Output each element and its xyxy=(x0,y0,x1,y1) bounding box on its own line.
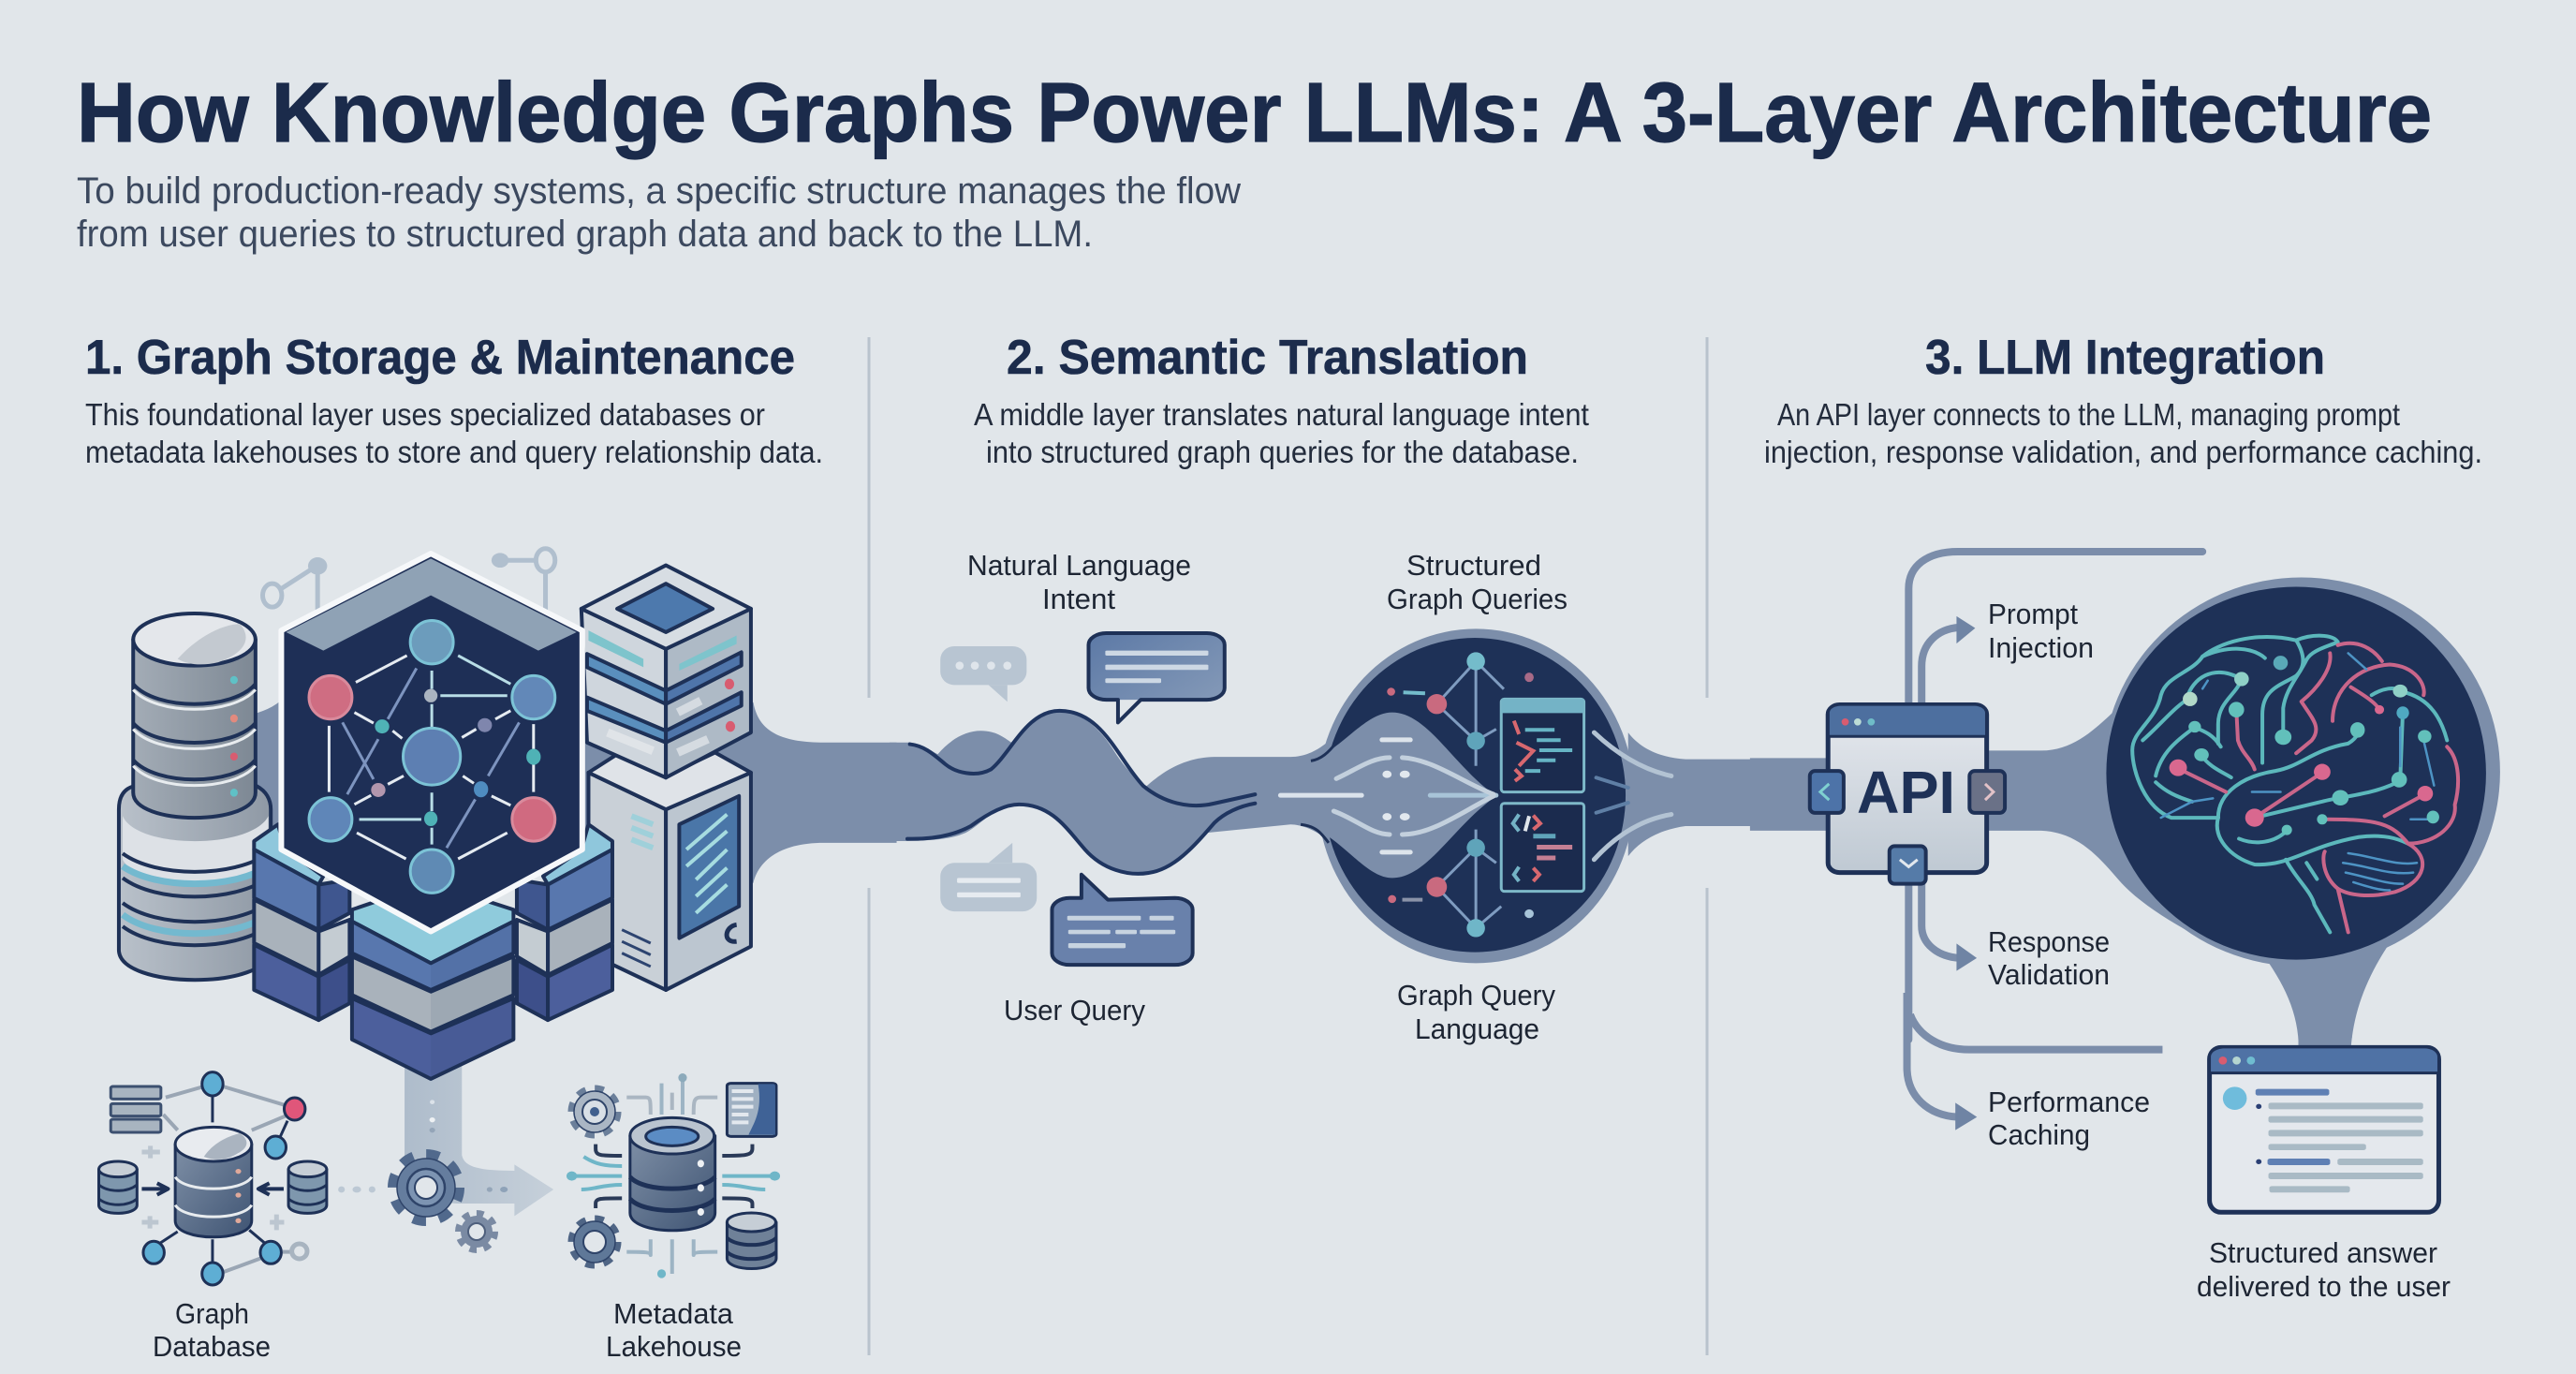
plus marks xyxy=(141,1145,284,1230)
heading: layer 3: 3. LLM Integration xyxy=(1925,331,2325,385)
graph edges xyxy=(329,656,534,859)
label: graph database: Database xyxy=(153,1330,271,1363)
brain circle xyxy=(2103,577,2500,967)
graph query language circle xyxy=(1280,628,1753,963)
label: prompt injection: Injection xyxy=(1988,631,2094,664)
branching lines from API xyxy=(1908,552,2202,1040)
label: response validation xyxy=(1988,925,2110,991)
bottom tab xyxy=(1890,846,1926,884)
small table xyxy=(110,1086,161,1132)
description: layer 2: A middle layer translates natural language intent xyxy=(974,397,1589,432)
central cylinder xyxy=(630,1117,715,1231)
top server cube xyxy=(581,566,751,777)
answer browser window xyxy=(2210,1037,2438,1212)
funnel lines xyxy=(1280,740,1496,852)
icon: metadata lakehouse xyxy=(567,1073,780,1278)
label: prompt injection: Prompt xyxy=(1988,598,2078,630)
exit streams xyxy=(1594,732,1671,860)
label: structured answer xyxy=(2197,1236,2451,1303)
title: How Knowledge Graphs Power LLMs: A 3-Layer Architecture xyxy=(77,66,2432,160)
label: graph query language: Language xyxy=(1415,1012,1539,1045)
description: layer 2 xyxy=(974,397,1589,469)
branching lines lower xyxy=(1907,993,2162,1117)
small database xyxy=(727,1213,776,1269)
subtitle: To build production-ready systems, a specific structure manages the flow xyxy=(77,170,1241,212)
label: structured graph queries: Structured xyxy=(1406,549,1541,582)
bottom tree xyxy=(1388,830,1534,938)
center blocks xyxy=(352,883,513,1079)
icon: process gear xyxy=(395,1157,457,1219)
bubble: faded bottom xyxy=(940,843,1037,911)
brain thin blue lines xyxy=(2161,653,2434,891)
flow: API to brain band xyxy=(1750,711,2281,936)
heading: layer 1: 1. Graph Storage & Maintenance xyxy=(85,331,795,385)
storage flow band xyxy=(247,696,897,883)
central cylinder xyxy=(175,1127,252,1237)
icon: lakehouse gear top xyxy=(573,1090,616,1133)
brain pink lines xyxy=(2176,643,2458,932)
icon: lakehouse gear bottom xyxy=(573,1220,616,1263)
icon: graph database xyxy=(99,1072,375,1285)
API box xyxy=(1810,705,2005,884)
code panel bottom xyxy=(1501,804,1584,892)
right blocks xyxy=(517,824,612,1020)
label: graph database: Graph xyxy=(175,1297,249,1330)
bubble: faded top xyxy=(940,646,1026,702)
label: structured answer: delivered to the user xyxy=(2197,1270,2451,1303)
divider right xyxy=(1706,337,1708,1355)
description: layer 3 xyxy=(1764,397,2482,469)
subtitle: from user queries to structured graph data and back to the LLM. xyxy=(77,214,1093,255)
arrow: response validation xyxy=(1956,943,1977,971)
table panel xyxy=(727,1084,776,1136)
label: graph database xyxy=(153,1297,271,1363)
side tab left xyxy=(1810,771,1844,813)
description: layer 2: into structured graph queries for the database. xyxy=(986,435,1579,469)
icon: small gear xyxy=(460,1215,493,1248)
heading: layer 2: 2. Semantic Translation xyxy=(1007,331,1528,385)
top tree xyxy=(1387,652,1534,766)
label: metadata lakehouse xyxy=(606,1297,742,1363)
upper cylinder xyxy=(133,613,256,818)
label: structured graph queries xyxy=(1387,549,1568,615)
left blocks xyxy=(254,824,349,1020)
stem from brain to answer xyxy=(2260,921,2387,1050)
label: structured graph queries: Graph Queries xyxy=(1387,583,1568,615)
label: metadata lakehouse: Lakehouse xyxy=(606,1330,742,1363)
description: layer 3: An API layer connects to the LLM, managing prompt xyxy=(1777,397,2400,432)
label: response validation: Validation xyxy=(1988,958,2110,991)
brain nodes xyxy=(2170,656,2439,835)
label: prompt injection xyxy=(1988,598,2094,664)
label: performance caching: Caching xyxy=(1988,1118,2090,1151)
connections xyxy=(163,1086,300,1272)
circuit lines xyxy=(572,1077,774,1274)
label: natural language intent: Intent xyxy=(1042,583,1115,615)
right band joining API xyxy=(1628,732,1753,856)
funnel xyxy=(1296,713,1496,878)
lower cylinder xyxy=(119,786,271,980)
arrow: performance caching xyxy=(1955,1102,1977,1130)
label: response validation: Response xyxy=(1988,925,2110,958)
bubble: natural language intent xyxy=(1089,633,1225,722)
label: structured answer: Structured answer xyxy=(2209,1236,2437,1269)
label: user query: User Query xyxy=(1004,994,1145,1027)
label: natural language intent: Natural Language xyxy=(967,549,1191,582)
description: layer 3: injection, response validation, and performance caching. xyxy=(1764,435,2482,469)
hexagon graph panel xyxy=(281,554,582,931)
divider left xyxy=(867,337,871,1355)
icon: decorative graph connectors xyxy=(263,549,555,613)
description: layer 1: This foundational layer uses specialized databases or xyxy=(85,397,765,432)
side cylinders xyxy=(99,1161,327,1213)
label: performance caching: Performance xyxy=(1988,1086,2150,1118)
API label: API xyxy=(1857,759,1955,826)
subtitle xyxy=(77,170,1241,255)
label: graph query language: Graph Query xyxy=(1397,979,1555,1012)
isometric storage stack xyxy=(119,549,751,1079)
arrow: storage down to lakehouse xyxy=(405,1009,553,1216)
description: layer 1 xyxy=(85,397,823,469)
label: performance caching xyxy=(1988,1086,2150,1151)
side tab right xyxy=(1969,771,2005,813)
bubble: user query xyxy=(1052,875,1193,965)
brain teal outline xyxy=(2132,636,2447,932)
side arrows xyxy=(141,1183,284,1195)
graph nodes xyxy=(309,620,555,893)
connector dots xyxy=(338,1187,375,1192)
arrow: prompt injection xyxy=(1956,616,1975,643)
label: graph query language xyxy=(1397,979,1555,1045)
lower server xyxy=(588,752,751,990)
label: metadata lakehouse: Metadata xyxy=(613,1297,734,1330)
label: natural language intent xyxy=(967,549,1191,615)
flow: semantic translation wave xyxy=(890,711,1332,875)
description: layer 1: metadata lakehouses to store and query relationship data. xyxy=(85,435,823,469)
graph nodes xyxy=(143,1072,307,1285)
code panel top xyxy=(1501,699,1584,792)
answer text lines xyxy=(2256,1089,2423,1192)
